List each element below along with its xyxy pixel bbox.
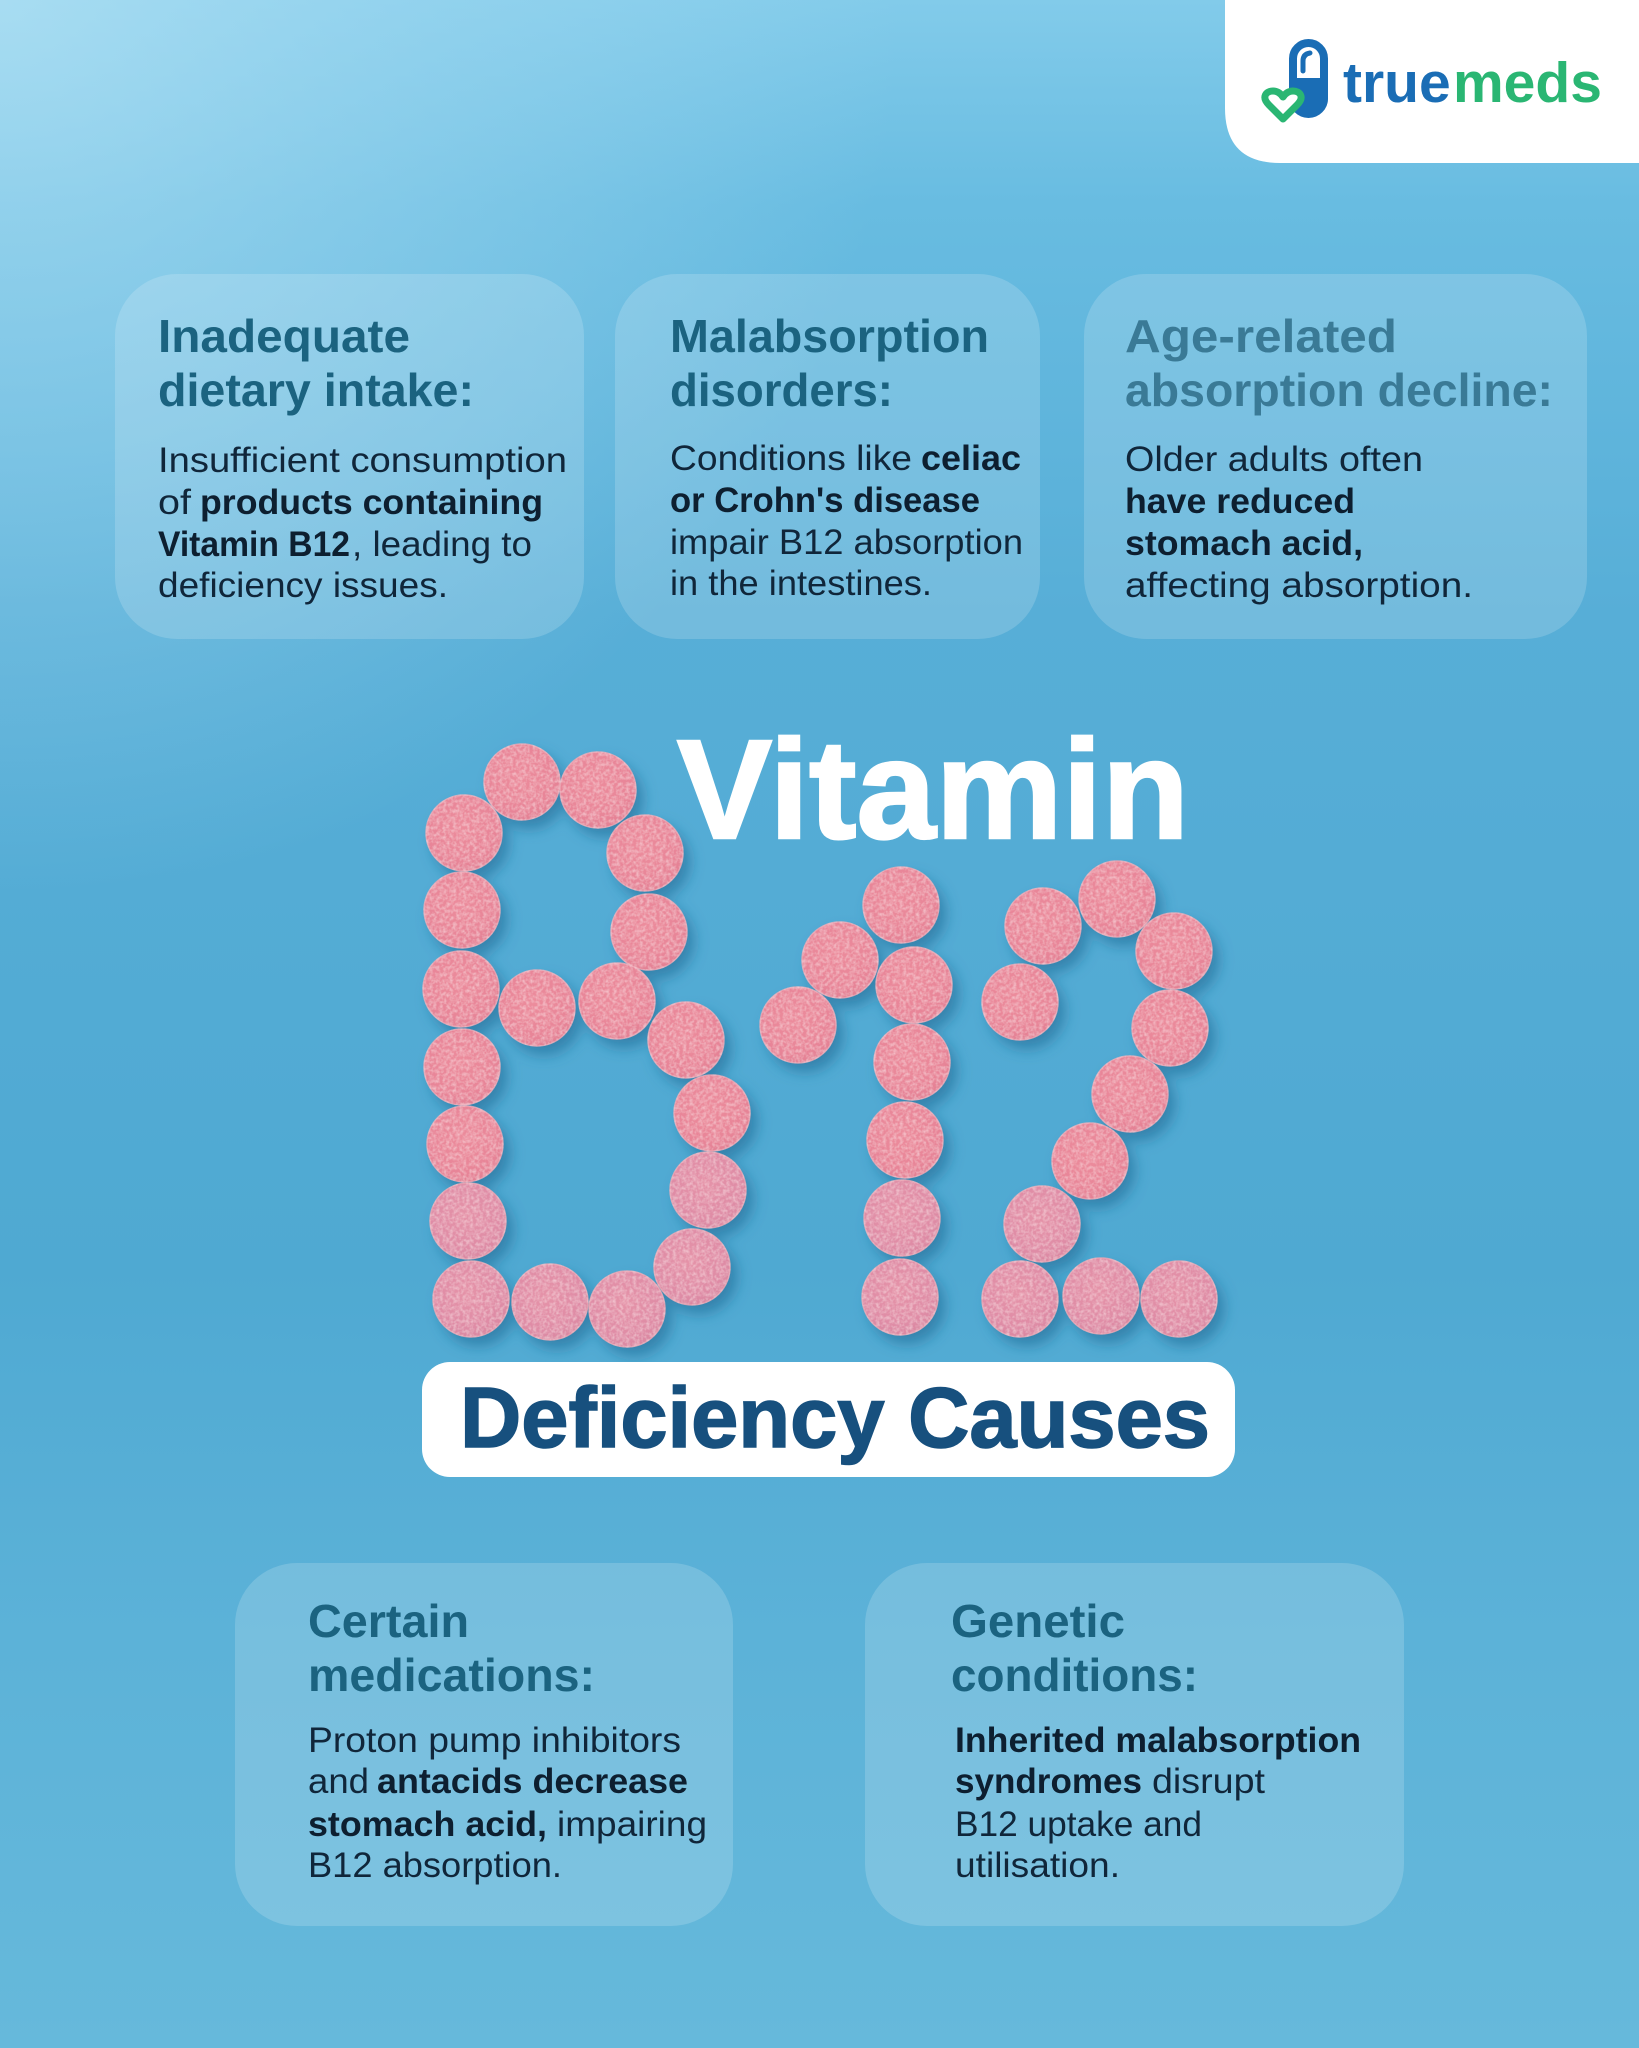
logo wordmark: true <box>1343 51 1451 115</box>
body text: antacids decrease <box>377 1762 688 1801</box>
body text: B12 uptake and <box>955 1805 1202 1844</box>
body text <box>158 441 567 605</box>
body text: or Crohn's disease <box>670 481 980 520</box>
body text: utilisation. <box>955 1846 1120 1885</box>
heading <box>670 310 989 416</box>
title: Vitamin: Vitamin <box>677 710 1189 868</box>
panel: malabsorption disorders <box>615 274 1040 639</box>
heading: disorders: <box>670 364 893 416</box>
pills forming B12 <box>423 744 1224 1356</box>
heading: dietary intake: <box>158 364 474 416</box>
body text <box>1125 440 1473 605</box>
panel: genetic conditions <box>865 1563 1404 1926</box>
body text: and <box>308 1762 369 1801</box>
heading <box>158 310 474 416</box>
pill shadows <box>430 753 1224 1356</box>
body text: stomach acid, <box>1125 524 1363 563</box>
body text: products containing <box>200 483 543 522</box>
logo wordmark: meds <box>1453 51 1602 115</box>
heading: absorption decline: <box>1125 364 1553 416</box>
body text <box>670 439 1023 603</box>
body text: B12 absorption. <box>308 1846 562 1885</box>
heading: Genetic <box>951 1595 1125 1647</box>
panel: certain medications <box>235 1563 733 1926</box>
heading: Certain <box>308 1595 469 1647</box>
body text: Older adults often <box>1125 440 1423 479</box>
body text: celiac <box>921 439 1021 478</box>
body text <box>308 1721 707 1885</box>
body text <box>955 1721 1361 1885</box>
heading: Inadequate <box>158 310 410 362</box>
body text: have reduced <box>1125 482 1355 521</box>
body text: impair B12 absorption <box>670 523 1023 562</box>
heading <box>951 1595 1198 1701</box>
heading: Age-related <box>1125 310 1397 362</box>
body text: disrupt <box>1152 1762 1265 1801</box>
panel: inadequate dietary intake <box>115 274 584 639</box>
icon: capsule with heart <box>1265 43 1328 119</box>
panel: age-related absorption decline <box>1084 274 1587 639</box>
heading <box>1125 310 1553 416</box>
body text: syndromes <box>955 1762 1142 1801</box>
title pill: Deficiency Causes: Deficiency Causes <box>460 1371 1210 1466</box>
body text: impairing <box>557 1805 707 1844</box>
body text: deficiency issues. <box>158 566 448 605</box>
body text: , leading to <box>352 525 532 564</box>
body text: Vitamin B12 <box>158 525 350 564</box>
body text: Inherited malabsorption <box>955 1721 1361 1760</box>
body text: stomach acid, <box>308 1805 547 1844</box>
heading: conditions: <box>951 1649 1198 1701</box>
heading: medications: <box>308 1649 595 1701</box>
body text: Conditions like <box>670 439 912 478</box>
logo panel <box>1225 0 1639 163</box>
body text: in the intestines. <box>670 564 932 603</box>
body text: Proton pump inhibitors <box>308 1721 681 1760</box>
heading <box>308 1595 595 1701</box>
body text: affecting absorption. <box>1125 566 1473 605</box>
heading: Malabsorption <box>670 310 989 362</box>
body text: of <box>158 483 191 522</box>
tablets <box>423 744 1217 1347</box>
body text: Insufficient consumption <box>158 441 567 480</box>
